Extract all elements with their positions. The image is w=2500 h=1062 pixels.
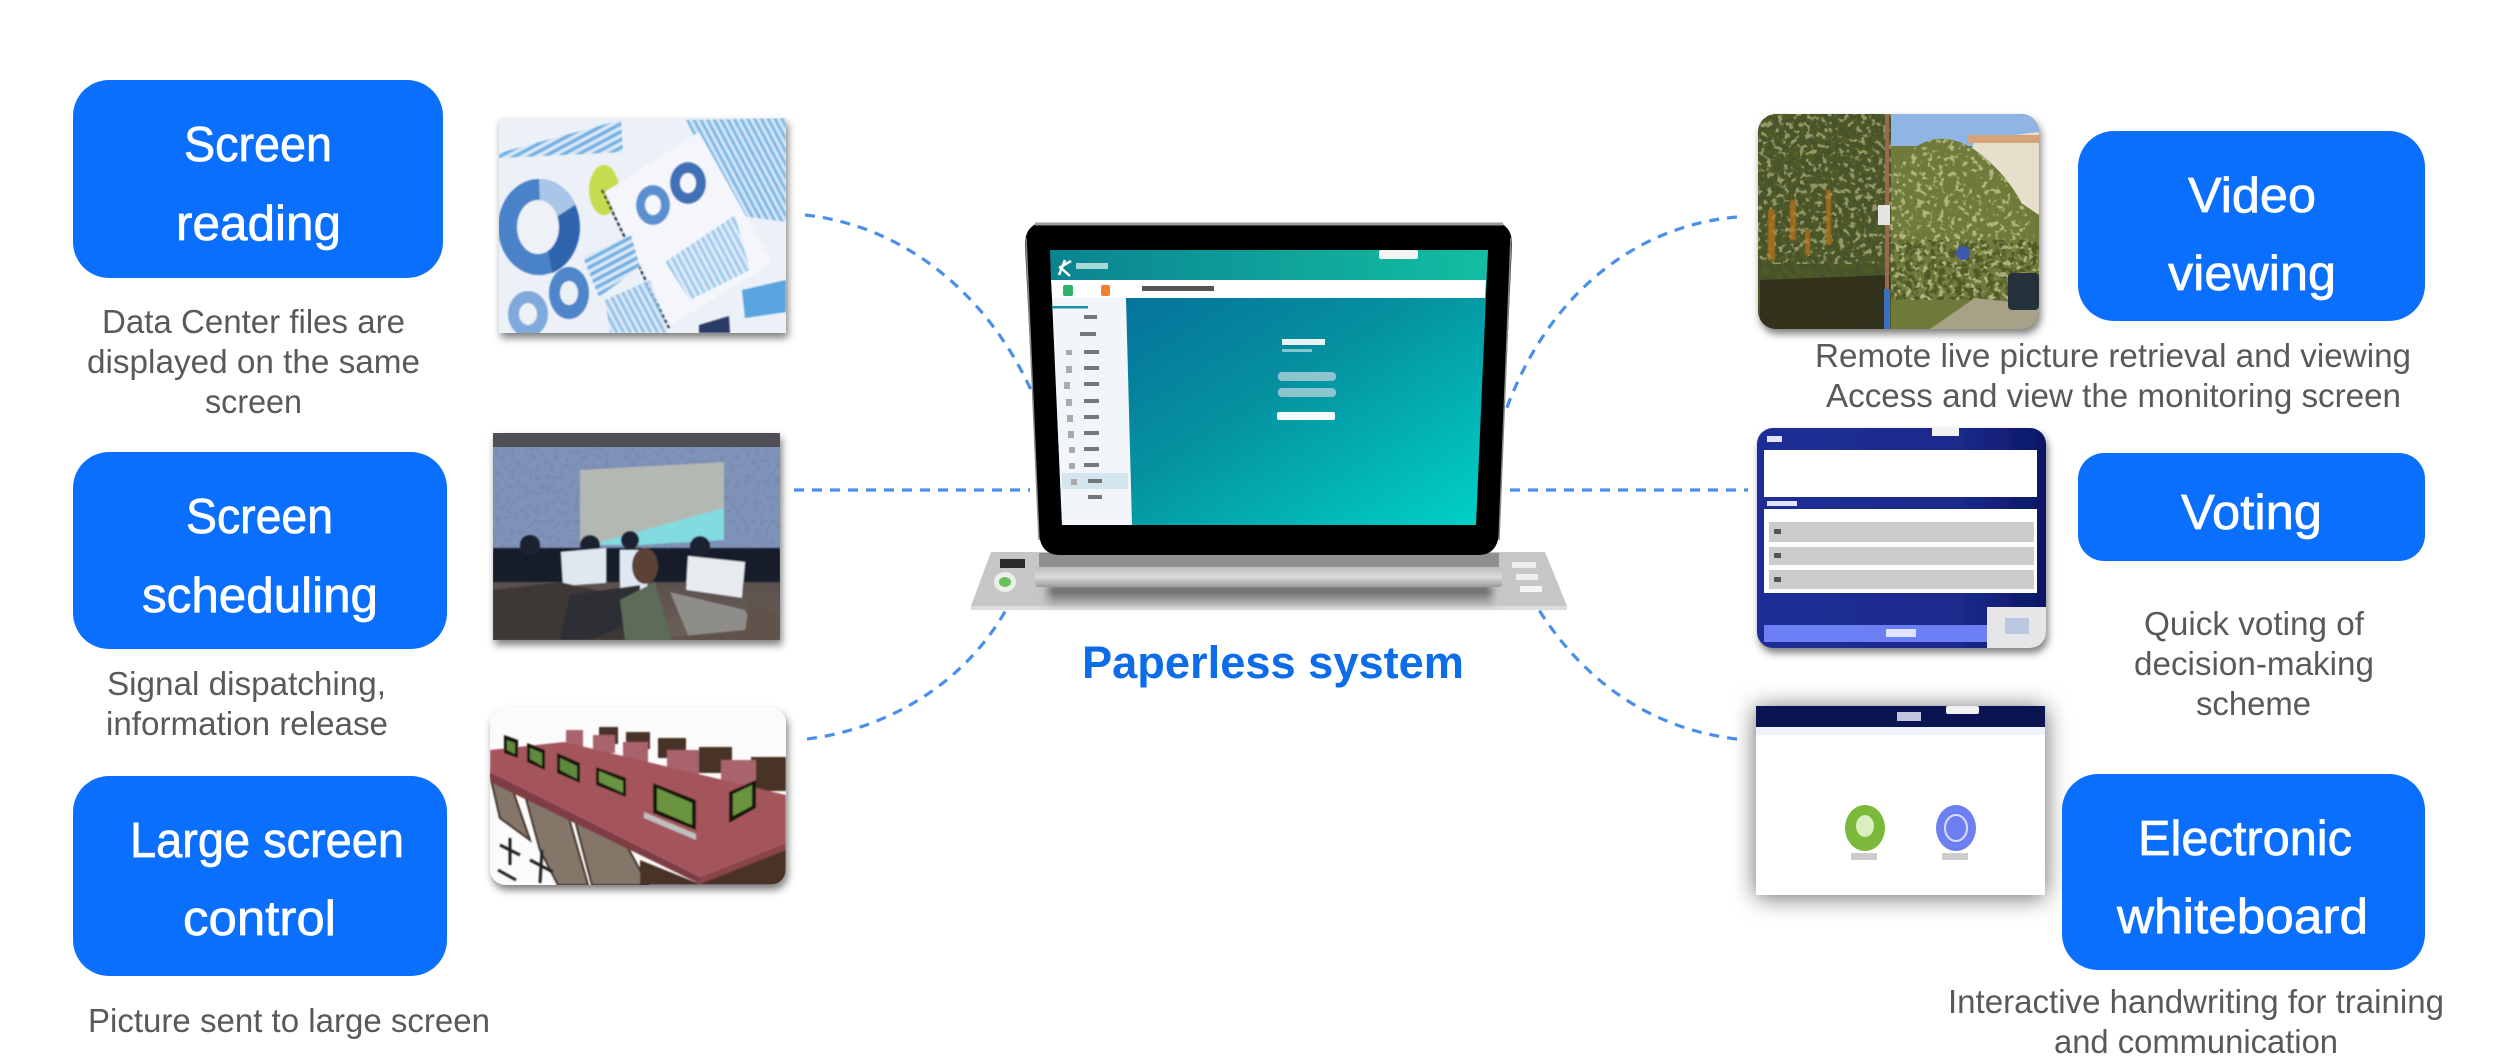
button: screen scheduling — [73, 452, 447, 649]
monitor — [1025, 223, 1512, 555]
button: video viewing — [2078, 131, 2425, 321]
button: screen reading: Screen — [184, 118, 332, 172]
image: control room — [493, 433, 780, 640]
description: screen scheduling: Signal dispatching, — [107, 665, 386, 702]
button: screen scheduling: scheduling — [142, 569, 378, 623]
description: voting: Quick voting of — [2144, 605, 2365, 642]
description: electronic whiteboard: Interactive handwriting for training — [1948, 983, 2444, 1020]
button: screen reading — [73, 80, 443, 278]
button: screen reading: reading — [176, 197, 341, 251]
description: screen reading: displayed on the same — [87, 343, 420, 380]
image: street surveillance view — [1758, 114, 2039, 329]
image: whiteboard interface — [1756, 706, 2045, 895]
description: electronic whiteboard: and communication — [2054, 1023, 2338, 1060]
button: electronic whiteboard: Electronic — [2138, 812, 2352, 866]
button: voting — [2078, 453, 2425, 561]
description: voting: scheme — [2196, 685, 2311, 722]
description: voting: decision-making — [2134, 645, 2374, 682]
panel: large screen control — [73, 707, 786, 1039]
description: screen reading: Data Center files are — [102, 303, 405, 340]
button: video viewing: Video — [2188, 169, 2316, 223]
panel: screen scheduling — [73, 433, 780, 742]
button: screen scheduling: Screen — [186, 490, 333, 544]
image: voting interface — [1757, 428, 2046, 648]
screen: login interface — [1050, 250, 1488, 525]
panel: screen reading — [73, 80, 786, 420]
button: electronic whiteboard — [2062, 774, 2425, 970]
button: large screen control: control — [183, 892, 336, 946]
panel: video viewing — [1758, 114, 2425, 414]
center product: paperless terminal — [971, 223, 1567, 610]
panel: electronic whiteboard — [1756, 706, 2453, 1060]
button: video viewing: viewing — [2168, 247, 2336, 301]
lift neck and roller — [1035, 553, 1502, 587]
image: data charts on paper — [498, 118, 786, 337]
button: voting: Voting — [2181, 486, 2322, 540]
description: screen reading: screen — [205, 383, 302, 420]
description: large screen control: Picture sent to large screen — [88, 1002, 490, 1039]
button: electronic whiteboard: whiteboard — [2116, 890, 2368, 944]
panel: voting — [1757, 428, 2425, 722]
description: screen scheduling: information release — [106, 705, 388, 742]
description: video viewing: Access and view the monitoring screen — [1826, 377, 2401, 414]
button: large screen control: Large screen — [130, 814, 404, 868]
description: video viewing: Remote live picture retrieval and viewing — [1815, 337, 2411, 374]
base plate — [971, 552, 1567, 610]
button: large screen control — [73, 776, 447, 976]
image: conference table — [490, 707, 786, 885]
title: Paperless system: Paperless system — [1082, 637, 1464, 688]
connector lines — [794, 215, 1748, 739]
